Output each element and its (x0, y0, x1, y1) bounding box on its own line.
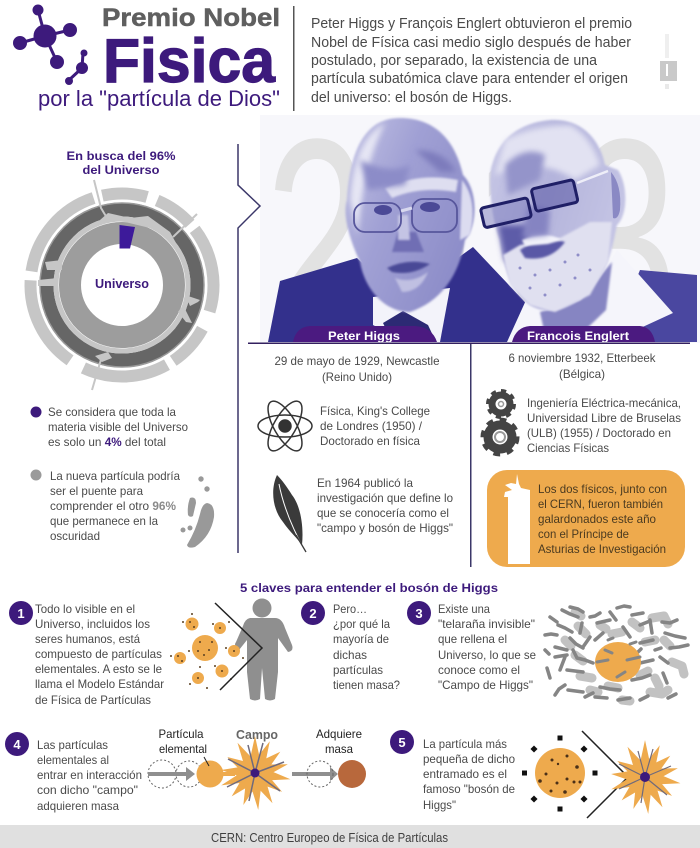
icon: gears (482, 391, 518, 454)
key 4 (5, 727, 366, 813)
text: education Englert: Ciencias Físicas (527, 441, 609, 455)
panel: Peter Higgs details (258, 354, 453, 552)
text: research Higgs: En 1964 publicó la (317, 476, 413, 490)
header logo: molecule icon (14, 5, 88, 84)
number badge 5: 5 (398, 735, 406, 750)
birth text: Higgs: 29 de mayo de 1929, Newcastle (274, 354, 440, 368)
title: Premio Nobel (102, 4, 280, 32)
intro paragraph: Nobel de Física casi medio siglo después de haber (311, 34, 631, 51)
text key 2: mayoría de (333, 632, 389, 646)
text key 3: Existe una (438, 602, 490, 616)
text key 1 (35, 602, 164, 707)
text key 5: pequeña de dicho (423, 752, 515, 766)
text: research Higgs (317, 476, 453, 535)
diagram: particle before field (148, 757, 235, 788)
label: Adquiere masa (316, 727, 362, 756)
icon: field burst (219, 736, 291, 810)
text key 2: partículas (333, 663, 383, 677)
key 2 (301, 601, 400, 692)
text key 3: que rellena el (438, 632, 507, 646)
text key 5: entramado es el (423, 767, 507, 781)
text key 1: Universo, incluidos los (35, 617, 150, 631)
icon: atom (258, 396, 312, 456)
name tag: Francois Englert (512, 326, 655, 343)
label: Particula elemental (158, 727, 207, 756)
number badge 1: 1 (17, 606, 25, 621)
illustration: Higgs boson particle (522, 736, 598, 812)
chevron pointer (215, 603, 262, 690)
number badge 5 (390, 730, 414, 754)
donut chart: Universo (95, 276, 149, 291)
callout: Principe de Asturias (487, 470, 685, 567)
legend item: visible matter: Se considera que toda la (48, 405, 176, 419)
text key 3 (438, 602, 536, 692)
heading: 5 claves: 5 claves para entender el bosón de Higgs (240, 581, 498, 595)
callout: Principe de Asturias: Los dos físicos, junto con (538, 482, 667, 496)
legend item: visible matter (30, 405, 188, 449)
text key 2: ¿por qué la (333, 617, 390, 631)
text key 5: La partícula más (423, 737, 507, 751)
legend item: new particle (30, 469, 180, 543)
text key 4: Las partículas (37, 738, 108, 752)
text key 5: famoso "bosón de (423, 782, 515, 796)
text key 4 (37, 738, 142, 813)
icon: feather (273, 475, 306, 552)
icon: burst (609, 740, 681, 814)
text: education Englert (527, 396, 681, 455)
callout: Principe de Asturias: el CERN, fueron también (538, 497, 663, 511)
panel: Francois Englert details (482, 351, 685, 567)
callout: Principe de Asturias: Asturias de Investigación (538, 542, 666, 556)
birth text: Englert: (Bélgica) (559, 367, 605, 381)
text key 2: tienen masa? (333, 678, 400, 692)
donut chart (0, 157, 250, 413)
legend item: new particle: comprender el otro 96% (50, 499, 176, 513)
number badge 3 (407, 601, 431, 625)
illustration: Higgs field web (545, 606, 688, 701)
title (38, 4, 280, 111)
bracket divider with chevron (238, 144, 260, 553)
birth text: Englert (508, 351, 656, 381)
text key 3: conoce como el (438, 663, 520, 677)
text key 1: seres humanos, está (35, 632, 140, 646)
text key 1: compuesto de partículas (35, 647, 162, 661)
icon: grey particle stains (180, 476, 214, 548)
callout: Principe de Asturias: con el Príncipe de (538, 527, 629, 541)
text key 4: elementales al (37, 753, 109, 767)
arrow to acquired mass (292, 760, 366, 788)
text: education Higgs (320, 404, 430, 448)
chevron pointer 5 (582, 731, 628, 818)
text: education Higgs: Física, King's College (320, 404, 430, 418)
text key 3: Universo, lo que se (438, 648, 536, 662)
legend item: new particle: La nueva partícula podría (50, 469, 180, 483)
number badge 4: 4 (13, 737, 21, 752)
intro paragraph: postulado, por separado, la existencia de una (311, 52, 598, 69)
text key 1: elementales. A esto se le (35, 662, 162, 676)
text key 4: con dicho "campo" (37, 783, 138, 797)
number badge 3: 3 (415, 606, 423, 621)
intro paragraph: Peter Higgs y François Englert obtuvieron el premio (311, 15, 632, 32)
birth text: Higgs (274, 354, 440, 384)
text: education Higgs: Doctorado en física (320, 434, 420, 448)
text key 3: "Campo de Higgs" (438, 678, 533, 692)
key 5 (390, 730, 681, 818)
key 1 (9, 598, 292, 707)
legend item: new particle: ser el puente para (50, 484, 143, 498)
icon: particles (170, 613, 244, 689)
text key 4: adquieren masa (37, 799, 119, 813)
label: Campo: Campo (236, 728, 278, 742)
text key 3: "telaraña invisible" (438, 617, 535, 631)
text: research Higgs: investigación que define lo (317, 491, 453, 505)
watermark icon (660, 34, 677, 89)
text: education Englert: (ULB) (1955) / Doctorado en (527, 426, 671, 440)
legend item: new particle: oscuridad (50, 529, 100, 543)
legend item: visible matter: materia visible del Universo (48, 420, 188, 434)
panel: universe (0, 149, 250, 548)
legend item: new particle: que permanece en la (50, 514, 158, 528)
text key 2: Pero… (333, 602, 367, 616)
intro paragraph: partícula subatómica clave para entender el origen (311, 70, 628, 87)
label: Adquiere masa: Adquiere (316, 727, 362, 741)
portrait: Peter Higgs (268, 118, 560, 342)
text key 2 (333, 602, 400, 692)
text: research Higgs: que se conocería como el (317, 506, 449, 520)
text: education Englert: Universidad Libre de Bruselas (527, 411, 681, 425)
text key 5: Higgs" (423, 798, 456, 812)
intro paragraph (311, 15, 632, 106)
text key 5 (423, 737, 515, 812)
key 3 (407, 601, 688, 701)
icon: human figure (235, 598, 292, 700)
text: education Englert: Ingeniería Eléctrica-mecánica, (527, 396, 681, 410)
label: Adquiere masa: masa (325, 742, 353, 756)
text key 1: llama el Modelo Estándar (35, 677, 164, 691)
text key 1: Todo lo visible en el (35, 602, 135, 616)
number badge 2: 2 (309, 606, 317, 621)
label: Particula elemental: Partícula (158, 727, 204, 741)
legend item: visible matter: es solo un 4% del total (48, 435, 166, 449)
birth text: Higgs: (Reino Unido) (322, 370, 392, 384)
text: research Higgs: "campo y bosón de Higgs" (317, 521, 453, 535)
title: Fisica (103, 27, 275, 96)
label: Particula elemental: elemental (159, 742, 207, 756)
heading: En busca del 96%: del Universo (82, 163, 160, 177)
number badge 4 (5, 732, 29, 756)
footer bar: CERN: Centro Europeo de Física de Partículas (211, 831, 448, 845)
birth text: Englert: 6 noviembre 1932, Etterbeek (508, 351, 656, 365)
text key 4: entrar en interacción (37, 768, 142, 782)
name tag: Peter Higgs (293, 326, 437, 343)
heading: En busca del 96%: En busca del 96% (66, 149, 176, 163)
heading: En busca del 96% (66, 149, 176, 177)
portrait: Francois Englert (480, 120, 697, 342)
name tag: Peter Higgs: Peter Higgs (328, 329, 400, 343)
text key 2: dichas (333, 648, 367, 662)
intro paragraph: del universo: el bosón de Higgs. (311, 89, 512, 106)
number badge 1 (9, 601, 33, 625)
footer bar (0, 825, 700, 848)
title: por la "partícula de Dios" (38, 86, 280, 111)
text: education Higgs: de Londres (1950) / (320, 419, 423, 433)
name tag: Francois Englert: Francois Englert (527, 329, 629, 343)
text key 1: de Física de Partículas (35, 693, 151, 707)
callout: Principe de Asturias: galardonados este año (538, 512, 656, 526)
